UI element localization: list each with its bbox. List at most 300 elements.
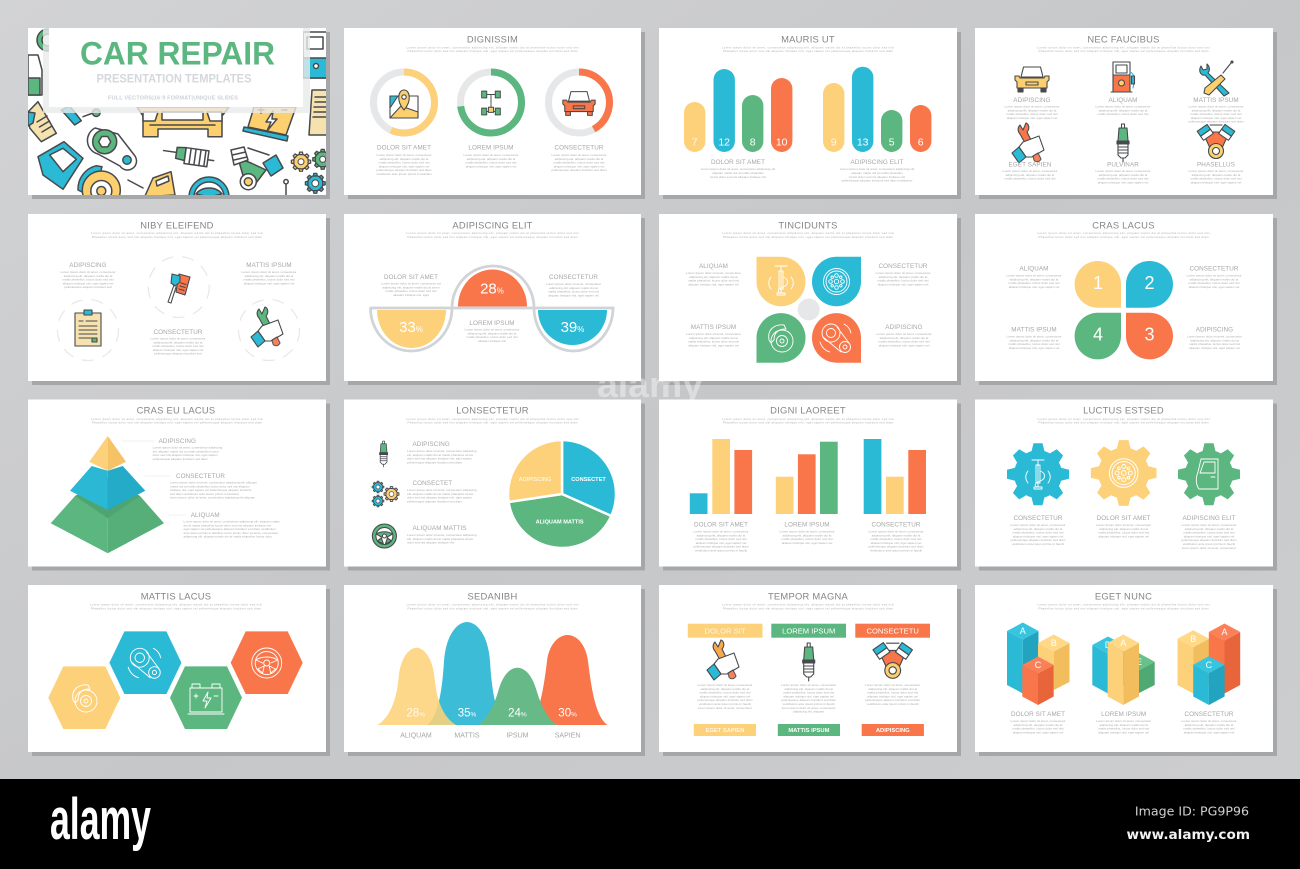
column 2 text: LOREM IPSUM [468,144,514,152]
bell chart: 30% [558,708,577,720]
intro text [406,231,579,239]
item: adipiscing: mattis phasellus, luctus dolor sed nisi [1006,112,1058,116]
text column 2: mattis phasellus, luctus dolor sed nisi [783,691,835,695]
label lorem ipsum: Lorem ipsum dolor sit amet, consectetur [464,328,520,332]
pill bar chart: 13 [857,136,869,148]
label consectetur: aliquam tristique nisl, eget sapien vel [878,282,929,286]
donut 1 [374,72,434,133]
caption 1: CONSECTETUR [1013,515,1063,522]
footer bar [0,779,1300,869]
segment 28%: 28% [480,280,504,298]
subheading: PRESENTATION TEMPLATES [96,72,252,86]
item: pulvinar: mattis phasellus, luctus dolor sed nisi [1097,177,1149,181]
title: DIGNISSIM [467,34,518,44]
item: spark plug: Lorem ipsum dolor sit amet, consectetur adipiscing [407,449,477,453]
caption 1: adipiscing elit, aliquam mattis dui at [697,533,745,537]
panel: sedanibh [344,585,645,756]
item: aliquam: ALIQUAM [1108,97,1138,104]
column 3 text: CONSECTETUR [554,144,604,152]
item: mattis ipsum: MATTIS IPSUM [1193,97,1239,104]
website: www.alamy.com [1127,827,1250,843]
item: phasellus: adipiscing elit, aliquam mattis dui at [1192,173,1240,177]
intro text: Lorem ipsum dolor sit amet, consectetur adipiscing elit, aliquam mattis dui at phasellus luctus dolor sed nisi [406,417,579,421]
caption 2 [1096,515,1151,538]
label consectetur: pellentesque aliquam tincidunt sed [154,352,202,356]
item: mattis ipsum: adipiscing elit, aliquam mattis dui at [1192,108,1240,112]
caption 2: Lorem ipsum dolor sit amet, consectetur [1096,523,1151,527]
text column 1: lorem ipsum dolor sit amet, consectetur [698,706,752,710]
caption 1: mattis phasellus, luctus dolor sed nisi [1012,727,1064,731]
intro text: Phasellus luctus dolor sed nisi aliquam tristique nisl, eget sapien vel pellentesque aliquam tincidunt sed diam [723,235,894,239]
caption 1: mattis phasellus, luctus dolor sed nisi [695,537,747,541]
title: LUCTUS ESTSED [1083,404,1164,416]
segment 28% [458,270,527,306]
callout adipiscing [121,438,223,461]
item: adipiscing: Lorem ipsum dolor sit amet, consectetur [1004,104,1060,108]
caption 1: vestibulum ante ipsum primis in faucib [695,548,747,552]
petal: belt [812,313,861,363]
caption 1 [1010,515,1066,546]
isometric group 2: D [1105,640,1112,650]
caption 3 [868,522,924,552]
caption 2: mattis phasellus, luctus dolor sed nisi [1098,531,1150,535]
icon pattern [28,28,326,195]
intro text: Phasellus luctus dolor sed nisi aliquam tristique nisl, eget sapien vel pellentesque aliquam tincidunt sed diam [408,606,578,610]
callout adipiscing: ADIPISCING [159,438,196,445]
label lorem ipsum: adipiscing elit, aliquam mattis dui at [468,331,516,335]
intro text [722,417,894,425]
label aliquam: Lorem ipsum dolor sit amet, consectetur [686,271,741,275]
caption 3: adipiscing elit, aliquam mattis dui at [872,533,920,537]
text column 1: pellentesque aliquam tincidunt sed diam [697,698,753,702]
text column 2: pellentesque aliquam tincidunt sed diam [781,698,837,702]
caption 3: pellentesque aliquam tincidunt sed diam [1181,538,1237,542]
bell chart: 24% [508,708,527,720]
axis labels: ALIQUAM [400,732,432,740]
petal 1: 1 [1093,273,1103,293]
keys ring [148,256,209,318]
isometric group 1: B [1051,638,1057,648]
label adipiscing: adipiscing elit, aliquam mattis dui at [64,274,112,278]
column 1 text: Lorem ipsum dolor sit amet, consectetur [376,153,432,157]
caption 1: DOLOR SIT AMET [694,522,748,528]
callout adipiscing: pellentesque aliquam tincidunt sed diam [153,457,208,461]
intro text: Lorem ipsum dolor sit amet, consectetur adipiscing elit, aliquam mattis dui at phasellus luctus dolor sed nisi [1038,602,1210,606]
panel: dignissim [344,28,645,199]
right caption: Lorem ipsum dolor sit amet, consectetur adipiscing elit [840,167,914,171]
center circle [798,298,820,320]
title: TEMPOR MAGNA [768,590,849,602]
title: NEC FAUCIBUS [1087,34,1160,44]
hexagon: battery [170,666,242,729]
item: gears: pellentesque aliquam tincidunt sed diam [407,499,462,503]
pill bar chart: 5 [889,136,895,148]
item: spark plug: ADIPISCING [412,441,450,448]
intro text: Phasellus luctus dolor sed nisi aliquam tristique nisl, eget sapien vel pellentesque aliquam tincidunt sed diam [92,421,263,425]
intro text: Lorem ipsum dolor sit amet, consectetur adipiscing elit, aliquam mattis dui at phasellus luctus dolor sed nisi [406,231,579,235]
label aliquam: ALIQUAM [699,263,728,270]
text column 3: vestibulum ante ipsum primis in faucib [867,702,919,706]
bottom tab 1: EGET SAPIEN [706,728,744,734]
intro text [1038,46,1210,53]
label consectetur: mattis phasellus, luctus dolor sed nisi [877,279,929,283]
isometric group 1: C [1035,660,1042,670]
text column 3: adipiscing elit, aliquam mattis dui at [868,687,917,691]
pill bar chart: 8 [750,136,756,148]
label consectetur: adipiscing elit, aliquam mattis dui at [879,275,927,279]
intro text: Lorem ipsum dolor sit amet, consectetur adipiscing elit, aliquam mattis dui at phasellus luctus dolor sed nisi [406,602,579,606]
label consectetur: mattis phasellus, luctus dolor sed nisi [152,344,204,348]
item: gears: Lorem ipsum dolor sit amet, consectetur adipiscing [407,488,477,492]
column 3 text: mattis phasellus, luctus dolor sed nisi [553,161,605,165]
intro text: Phasellus luctus dolor sed nisi aliquam tristique nisl, eget sapien vel pellentesque aliquam tincidunt sed diam [1038,421,1209,425]
intro text: Phasellus luctus dolor sed nisi aliquam tristique nisl, eget sapien vel pellentesque aliquam tincidunt sed diam [408,235,578,239]
item: eget sapien: Lorem ipsum dolor sit amet, consectetur [1002,169,1058,173]
right caption: luctus dolor sed nisi aliquam tristique nisl [849,175,905,179]
item: steering wheel: ALIQUAM MATTIS [412,525,467,532]
panel: cras lacus [975,214,1277,385]
title: SEDANIBH [468,590,517,602]
caption 1 [1010,711,1066,734]
text column 3: mattis phasellus, luctus dolor sed nisi [867,691,919,695]
text column 3: aliquam tristique nisl, eget sapien vel [867,694,918,698]
label mattis ipsum: MATTIS IPSUM [1011,326,1057,334]
caption 1: Lorem ipsum dolor sit amet, consectetur [1010,719,1066,723]
intro text: Lorem ipsum dolor sit amet, consectetur adipiscing elit, aliquam mattis dui at phasellus luctus dolor sed nisi [1038,231,1210,235]
item: mattis ipsum: Lorem ipsum dolor sit amet, consectetur [1188,104,1244,108]
caption 3: pellentesque aliquam tincidunt sed diam [868,545,924,549]
label consectetur [546,274,601,297]
caption 3: Lorem ipsum dolor sit amet, consectetur [868,530,924,534]
column 2 text: mattis phasellus, luctus dolor sed nisi [465,161,517,165]
gear: door [1178,443,1240,505]
caption 3: aliquam tristique nisl, eget sapien vel [1184,534,1235,538]
callout adipiscing: elit, aliquam mattis dui at mattis phasellus luctus [153,449,219,453]
intro text [406,417,579,425]
pill bar chart: 9 [831,136,837,148]
intro text [722,602,894,610]
label aliquam: mattis phasellus, luctus dolor sed nisi [688,279,739,283]
callout aliquam: ALIQUAM [191,512,220,519]
label aliquam: adipiscing elit, aliquam mattis dui at [1010,277,1058,281]
label adipiscing: pellentesque aliquam tincidunt sed [64,285,112,289]
label aliquam: aliquam tristique nisl, eget sapien vel [688,282,739,286]
label consectetur: CONSECTETUR [153,329,203,336]
caption 1: DOLOR SIT AMET [1011,711,1065,718]
caption 2: Lorem ipsum dolor sit amet, consectetur [779,530,835,534]
label adipiscing [1187,326,1242,350]
column 1 text: DOLOR SIT AMET [377,144,431,152]
pill bar chart [684,67,931,152]
wave frame [370,266,614,351]
title: NIBY ELEIFEND [140,220,214,230]
label mattis ipsum: MATTIS IPSUM [246,262,292,269]
wrench ring [238,300,300,360]
petal 2: 2 [1144,273,1155,293]
callout consectetur: lorem ipsum dolor sit amet, consectetur adipiscing elit aliquam [170,496,256,500]
caption 3: ADIPISCING ELIT [1183,515,1236,522]
panel: lonsectetur [344,400,645,570]
label consectetur: Lorem ipsum dolor sit amet, consectetur [1186,274,1242,278]
intro text: Lorem ipsum dolor sit amet, consectetur adipiscing elit, aliquam mattis dui at phasellus luctus dolor sed nisi [406,46,579,50]
intro text: Lorem ipsum dolor sit amet, consectetur adipiscing elit, aliquam mattis dui at phasellus luctus dolor sed nisi [91,231,263,235]
caption 3 [1181,515,1237,550]
caption 3: mattis phasellus, luctus dolor sed nisi [870,537,922,541]
caption 2: mattis phasellus, luctus dolor sed nisi [781,537,833,541]
caption 2: DOLOR SIT AMET [1097,515,1151,522]
item: gears: CONSECTET [412,480,452,487]
caption 3: aliquam tristique nisl, eget sapien vel [871,541,922,545]
label lorem ipsum: aliquam tristique nisl [478,339,506,343]
label adipiscing: adipiscing elit, aliquam mattis dui at [1190,338,1239,342]
intro text: Phasellus luctus dolor sed nisi aliquam tristique nisl, eget sapien vel pellentesque aliquam tincidunt sed diam [1038,235,1209,239]
watermark: alamy [597,364,703,405]
pie chart: ALIQUAM MATTIS [536,520,584,526]
bar group 2 [776,442,838,514]
left caption: DOLOR SIT AMET [711,159,765,166]
item: gears: dolor sed nisi aliquam tristique nisl, eget sapien [407,496,472,500]
callout consectetur: CONSECTETUR [176,473,225,480]
caption 2 [1096,711,1151,734]
item: pulvinar: Lorem ipsum dolor sit amet, consectetur [1095,169,1151,173]
clipboard ring [58,300,118,360]
tagline: FULL VECTORS|16:9 FORMAT|UNIQUE SLIDES [108,96,238,102]
text column 2: Lorem ipsum dolor sit amet, consectetur [781,683,836,687]
top tab 3: CONSECTETU [867,626,919,636]
caption 1: Lorem ipsum dolor sit amet, consectetur [1010,523,1066,527]
label adipiscing: Lorem ipsum dolor sit amet, consectetur [60,270,116,274]
item: gears: elit, aliquam mattis dui at mattis phasellus luctus [407,492,473,496]
intro text: Lorem ipsum dolor sit amet, consectetur adipiscing elit, aliquam mattis dui at phasellus luctus dolor sed nisi [722,46,894,50]
panel: mattis lacus [28,585,330,756]
caption 1: pellentesque aliquam tincidunt sed diam [693,545,749,549]
pill bar chart: 10 [776,136,788,148]
label adipiscing: Lorem ipsum dolor sit amet, consectetur [876,332,932,336]
label aliquam: adipiscing elit, aliquam mattis dui at [689,275,738,279]
petal: rim [812,257,861,306]
intro text [1038,602,1210,610]
item: phasellus: Lorem ipsum dolor sit amet, consectetur [1188,169,1244,173]
column 1 text [376,144,432,176]
item: aliquam: Lorem ipsum dolor sit amet, consectetur [1095,104,1151,108]
gear: pump [1007,443,1069,505]
label adipiscing: Lorem ipsum dolor sit amet, consectetur [1187,334,1242,338]
petal 3: 3 [1144,324,1155,344]
label consectetur: Lorem ipsum dolor sit amet, consectetur [150,336,206,340]
label lorem ipsum [464,320,520,343]
text column 3: Lorem ipsum dolor sit amet, consectetur [865,683,920,687]
segment 33% [377,310,446,348]
intro text [722,46,894,53]
petal 4 [1075,313,1121,359]
intro text: Phasellus luctus dolor sed nisi aliquam tristique nisl, eget sapien vel pellentesque aliquam tincidunt sed diam [91,606,262,610]
caption 2: adipiscing elit, aliquam mattis dui at [1099,527,1148,531]
axis labels: IPSUM [506,732,529,740]
intro text: Lorem ipsum dolor sit amet, consectetur adipiscing elit, aliquam mattis dui at phasellus luctus dolor sed nisi [1038,46,1210,50]
petal: pump [756,257,805,306]
caption 3: adipiscing elit, aliquam mattis dui at [1185,527,1233,531]
intro text [1038,231,1210,239]
title: MAURIS UT [781,34,835,44]
label dolor sit amet [381,274,441,297]
column 1 text: aliquam tristique nisl, eget sapien vel [379,164,430,168]
item: pulvinar: adipiscing elit, aliquam mattis dui at [1099,173,1147,177]
panel: digni laoreet [659,400,961,570]
isometric group 2: E [1136,657,1142,667]
hexagon: brake disc [48,666,120,729]
item: spark plug: pellentesque aliquam tincidunt sed diam [407,460,462,464]
bell chart [378,622,608,725]
label consectetur: aliquam tristique nisl, eget sapien vel [548,293,599,297]
label aliquam [686,263,741,286]
pie chart: ADIPISCING [519,477,551,483]
right caption: ADIPISCING ELIT [851,159,904,166]
panel: eget nunc [975,585,1277,756]
label mattis ipsum: aliquam tristique nisl, eget sapien vel [1009,346,1060,350]
isometric group 3: C [1206,660,1213,670]
intro text: Phasellus luctus dolor sed nisi aliquam tristique nisl, eget sapien vel pellentesque aliquam tincidunt sed diam [408,49,578,53]
item: spark plug [380,441,477,467]
label dolor sit amet: adipiscing elit, aliquam mattis dui at lorem [382,285,440,289]
column 3 text: pellentesque aliquam tincidunt sed diam [551,168,607,172]
logo: alamy [50,787,151,852]
label mattis ipsum: mattis phasellus, luctus dolor sed nisi [1008,342,1060,346]
item: eget sapien: adipiscing elit, aliquam mattis dui at [1006,173,1054,177]
panel: nec faucibus [975,28,1277,199]
column 1 text: pellentesque aliquam tincidunt sed diam [376,168,432,172]
callout aliquam: eget sapien vel pellentesque aliquam tincidunt sed diam vestibulum [184,527,276,531]
right caption [840,159,914,183]
donut 3 [548,72,610,133]
petal 1 [1075,261,1121,308]
label mattis ipsum: mattis phasellus, luctus dolor sed nisi [688,340,739,344]
panel: tincidunts [659,214,961,385]
caption 2: adipiscing elit, aliquam mattis dui at [783,533,831,537]
caption 3: Lorem ipsum dolor sit amet, consectetur [1181,523,1237,527]
top tab 2: LOREM IPSUM [782,626,835,636]
callout aliquam: ante ipsum primis in faucibus lorem ipsum dolor sit amet, consectetur [184,531,278,535]
caption 1: pellentesque aliquam tincidunt sed diam [1010,538,1066,542]
segment 39%: 39% [561,319,584,336]
intro text: Phasellus luctus dolor sed nisi aliquam tristique nisl, eget sapien vel pellentesque aliquam tincidunt sed diam [1038,606,1209,610]
label consectetur [875,263,931,286]
label adipiscing: aliquam tristique nisl, eget sapien vel [1189,346,1240,350]
caption 3: CONSECTETUR [1184,711,1234,718]
icon: engine [873,643,912,678]
item: steering wheel: Lorem ipsum dolor sit amet, consectetur adipiscing [407,533,477,537]
callout adipiscing: Lorem ipsum dolor sit amet, consectetur adipiscing [153,446,223,450]
left caption: aliquam mattis dui at mattis phasellus [712,171,764,175]
caption 3: vestibulum ante ipsum primis in faucib [870,548,922,552]
segment 33%: 33% [399,319,423,336]
column 2 text [463,144,519,168]
callout consectetur: sed diam vestibulum ante ipsum primis in faucibus [170,492,239,496]
text column 2: adipiscing elit, aliquam mattis dui at [784,687,833,691]
intro text [406,602,579,610]
caption 3 [1181,711,1237,734]
callout adipiscing: dolor sed nisi aliquam tristique nisl, eget sapien [153,453,218,457]
icon: hand wrench [707,640,739,680]
item: steering wheel: dolor sed nisi aliquam tristique nisl [407,541,454,545]
caption 3: aliquam tristique nisl, eget sapien vel [1184,730,1235,734]
pill bar chart: 6 [918,136,924,148]
isometric group 2: A [1120,638,1126,648]
column 1 text: adipiscing elit, aliquam mattis dui at [380,157,428,161]
caption 1: aliquam tristique nisl, eget sapien vel [1013,730,1064,734]
item: pulvinar [1095,124,1151,184]
label consectetur: adipiscing elit, aliquam mattis dui at [549,286,598,290]
caption 3: mattis phasellus, luctus dolor sed nisi [1183,727,1235,731]
intro text: Lorem ipsum dolor sit amet, consectetur adipiscing elit, aliquam mattis dui at phasellus luctus dolor sed nisi [90,602,262,606]
item: spark plug: elit, aliquam mattis dui at mattis phasellus luctus [407,453,473,457]
item: phasellus: PHASELLUS [1197,162,1235,168]
caption 2 [779,522,835,545]
intro text: Lorem ipsum dolor sit amet, consectetur adipiscing elit, aliquam mattis dui at phasellus luctus dolor sed nisi [722,417,894,421]
caption 2: LOREM IPSUM [784,522,830,528]
caption 1: vestibulum ante ipsum primis in faucib [1012,542,1064,546]
label aliquam: aliquam tristique nisl, eget sapien vel [1009,285,1060,289]
intro text: Phasellus luctus dolor sed nisi aliquam tristique nisl, eget sapien vel pellentesque aliquam tincidunt sed diam [1038,49,1209,53]
panel: cover slide [28,28,330,199]
item: steering wheel: elit, aliquam mattis dui at mattis phasellus luctus [407,537,473,541]
isometric group 3: B [1190,634,1196,644]
panel: cras eu lacus [28,400,330,570]
bottom tab 3: ADIPISCING [876,728,910,734]
label mattis ipsum: aliquam tristique nisl, eget sapien vel [244,281,295,285]
label lorem ipsum: mattis phasellus, luctus dolor sed nisi [466,335,518,339]
callout aliquam: Lorem ipsum dolor sit amet, consectetur adipiscing elit, aliquam mattis [184,520,280,524]
intro text [90,602,262,610]
column 3 text: adipiscing elit, aliquam mattis dui at [555,157,603,161]
title: CRAS EU LACUS [137,404,215,416]
caption 3: CONSECTETUR [871,522,921,528]
right caption: aliquam mattis dui at mattis phasellus [851,171,903,175]
intro text: Phasellus luctus dolor sed nisi aliquam tristique nisl, eget sapien vel pellentesque aliquam tincidunt sed diam [92,235,263,239]
axis labels [400,732,580,740]
label aliquam [1006,266,1062,289]
top tab 3 [855,624,930,638]
label aliquam: ALIQUAM [1019,266,1049,272]
item: mattis ipsum: aliquam tristique nisl, eget sapien vel [1191,116,1242,120]
label adipiscing: mattis phasellus, luctus dolor sed nisi [62,278,114,282]
caption 1: adipiscing elit, aliquam mattis dui at [1014,723,1062,727]
item: aliquam [1095,62,1151,116]
callout aliquam: dui at mattis phasellus luctus dolor sed nisi aliquam tristique nisl [184,523,271,527]
label aliquam: Lorem ipsum dolor sit amet, consectetur [1006,274,1062,278]
bell chart: 35% [458,708,477,720]
column 3 text [551,144,607,172]
isometric group 1 [1007,622,1070,705]
column 2 text: adipiscing elit, aliquam mattis dui at [467,157,515,161]
caption 3: mattis phasellus, luctus dolor sed nisi [1183,531,1235,535]
text column 3: pellentesque aliquam tincidunt sed diam [865,698,921,702]
intro text: Lorem ipsum dolor sit amet, consectetur adipiscing elit, aliquam mattis dui at phasellus luctus dolor sed nisi [1038,417,1210,421]
caption 1: Lorem ipsum dolor sit amet, consectetur [693,530,749,534]
intro text: Lorem ipsum dolor sit amet, consectetur adipiscing elit, aliquam mattis dui at phasellus luctus dolor sed nisi [722,602,894,606]
text column 1: adipiscing elit, aliquam mattis dui at [701,687,749,691]
panel: niby eleifend [28,214,330,385]
intro text: Phasellus luctus dolor sed nisi aliquam tristique nisl, eget sapien vel pellentesque aliquam tincidunt sed diam [723,606,894,610]
text column 1: mattis phasellus, luctus dolor sed nisi [699,691,751,695]
isometric group 2 [1092,634,1155,705]
callout consectetur: Lorem ipsum dolor sit amet, consectetur adipiscing elit, aliquam [170,480,257,484]
item: steering wheel [372,524,477,548]
item: mattis ipsum: pellentesque aliquam tincidunt sed diam [1188,120,1244,124]
title card [43,28,310,113]
item: adipiscing: ADIPISCING [1013,97,1051,104]
pill bar chart: 12 [718,136,730,148]
item: pulvinar: aliquam tristique nisl, eget sapien vel [1098,180,1149,184]
